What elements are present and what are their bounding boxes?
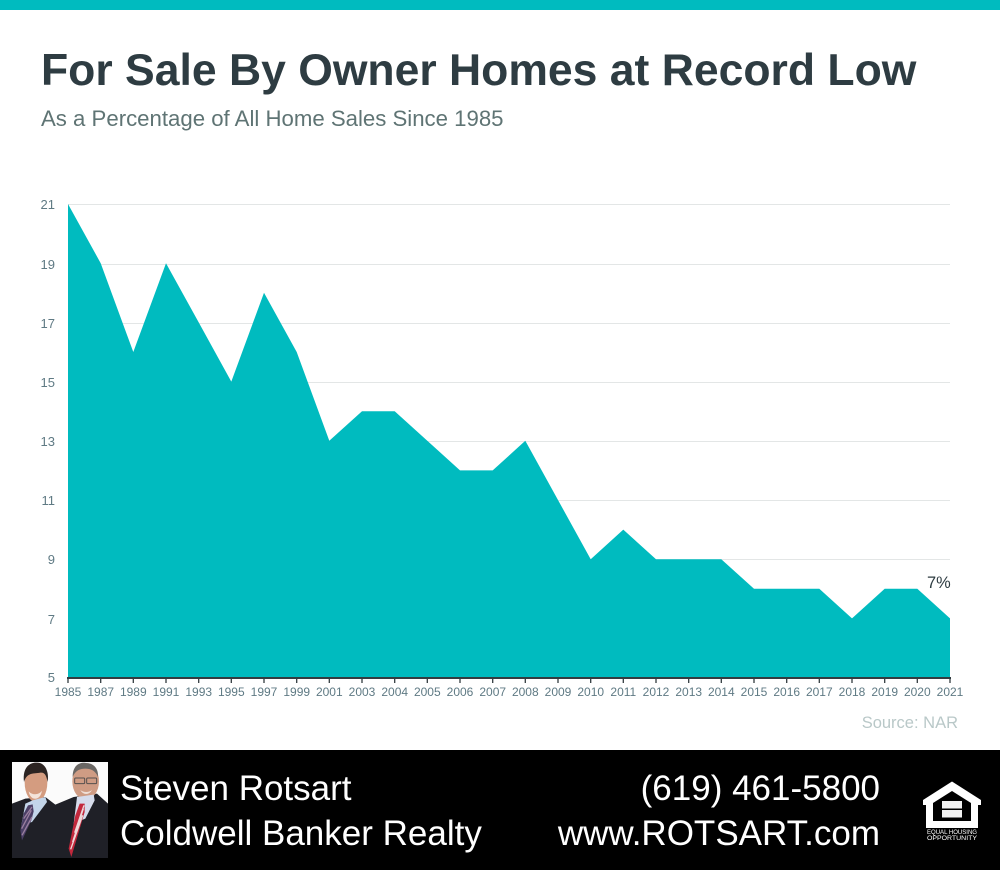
icon: equal housing opportunity: OPPORTUNITY <box>927 835 978 842</box>
top accent bar <box>0 0 1000 10</box>
x axis labels: 2010 <box>577 685 604 699</box>
x axis labels: 1995 <box>218 685 245 699</box>
data label: 7%: 7% <box>927 574 951 592</box>
phone number: (619) 461-5800 <box>641 769 880 808</box>
company name: Coldwell Banker Realty <box>120 814 482 853</box>
x axis line and ticks <box>67 678 951 683</box>
y axis labels: 15 <box>41 375 55 390</box>
x axis labels: 2016 <box>773 685 800 699</box>
x axis labels: 2003 <box>349 685 376 699</box>
x axis labels: 2007 <box>479 685 506 699</box>
source: Source: NAR <box>862 714 958 732</box>
footer band <box>0 750 1000 870</box>
subtitle: As a Percentage of All Home Sales Since 1985 <box>41 106 504 131</box>
x axis labels: 2011 <box>610 685 637 699</box>
x axis labels: 2013 <box>675 685 702 699</box>
y axis labels: 13 <box>41 434 55 449</box>
x axis labels: 2019 <box>871 685 898 699</box>
x axis labels: 1989 <box>120 685 147 699</box>
y axis labels: 9 <box>48 552 55 567</box>
y axis labels: 7 <box>48 612 55 627</box>
x axis labels: 1987 <box>87 685 114 699</box>
y axis labels: 21 <box>41 197 55 212</box>
x axis labels: 2001 <box>316 685 343 699</box>
x axis labels: 2020 <box>904 685 931 699</box>
x axis labels: 2005 <box>414 685 441 699</box>
y axis labels: 11 <box>42 493 55 508</box>
x axis labels: 2006 <box>447 685 474 699</box>
x axis labels: 2021 <box>937 685 964 699</box>
x axis labels: 1999 <box>283 685 310 699</box>
x axis labels: 1997 <box>251 685 278 699</box>
y axis labels: 5 <box>48 670 55 685</box>
icon: equal housing opportunity <box>923 782 981 842</box>
area chart <box>41 197 964 732</box>
title: For Sale By Owner Homes at Record Low <box>41 46 916 95</box>
x axis labels: 2017 <box>806 685 833 699</box>
x axis labels: 2018 <box>839 685 866 699</box>
y axis labels <box>41 197 55 685</box>
icon: equal housing opportunity: EQUAL HOUSING <box>927 829 977 836</box>
x axis labels: 2008 <box>512 685 539 699</box>
area series <box>68 204 950 678</box>
agent name: Steven Rotsart <box>120 769 352 808</box>
agent photo <box>12 762 108 858</box>
y axis labels: 17 <box>41 316 55 331</box>
x axis labels: 1985 <box>55 685 82 699</box>
x axis labels: 2012 <box>643 685 670 699</box>
x axis labels: 2014 <box>708 685 735 699</box>
x axis labels <box>55 685 964 699</box>
y axis labels: 19 <box>41 257 55 272</box>
x axis labels: 2015 <box>741 685 768 699</box>
website: www.ROTSART.com <box>558 814 880 853</box>
x axis labels: 2004 <box>381 685 408 699</box>
x axis labels: 2009 <box>545 685 572 699</box>
x axis labels: 1993 <box>185 685 212 699</box>
x axis labels: 1991 <box>153 685 180 699</box>
